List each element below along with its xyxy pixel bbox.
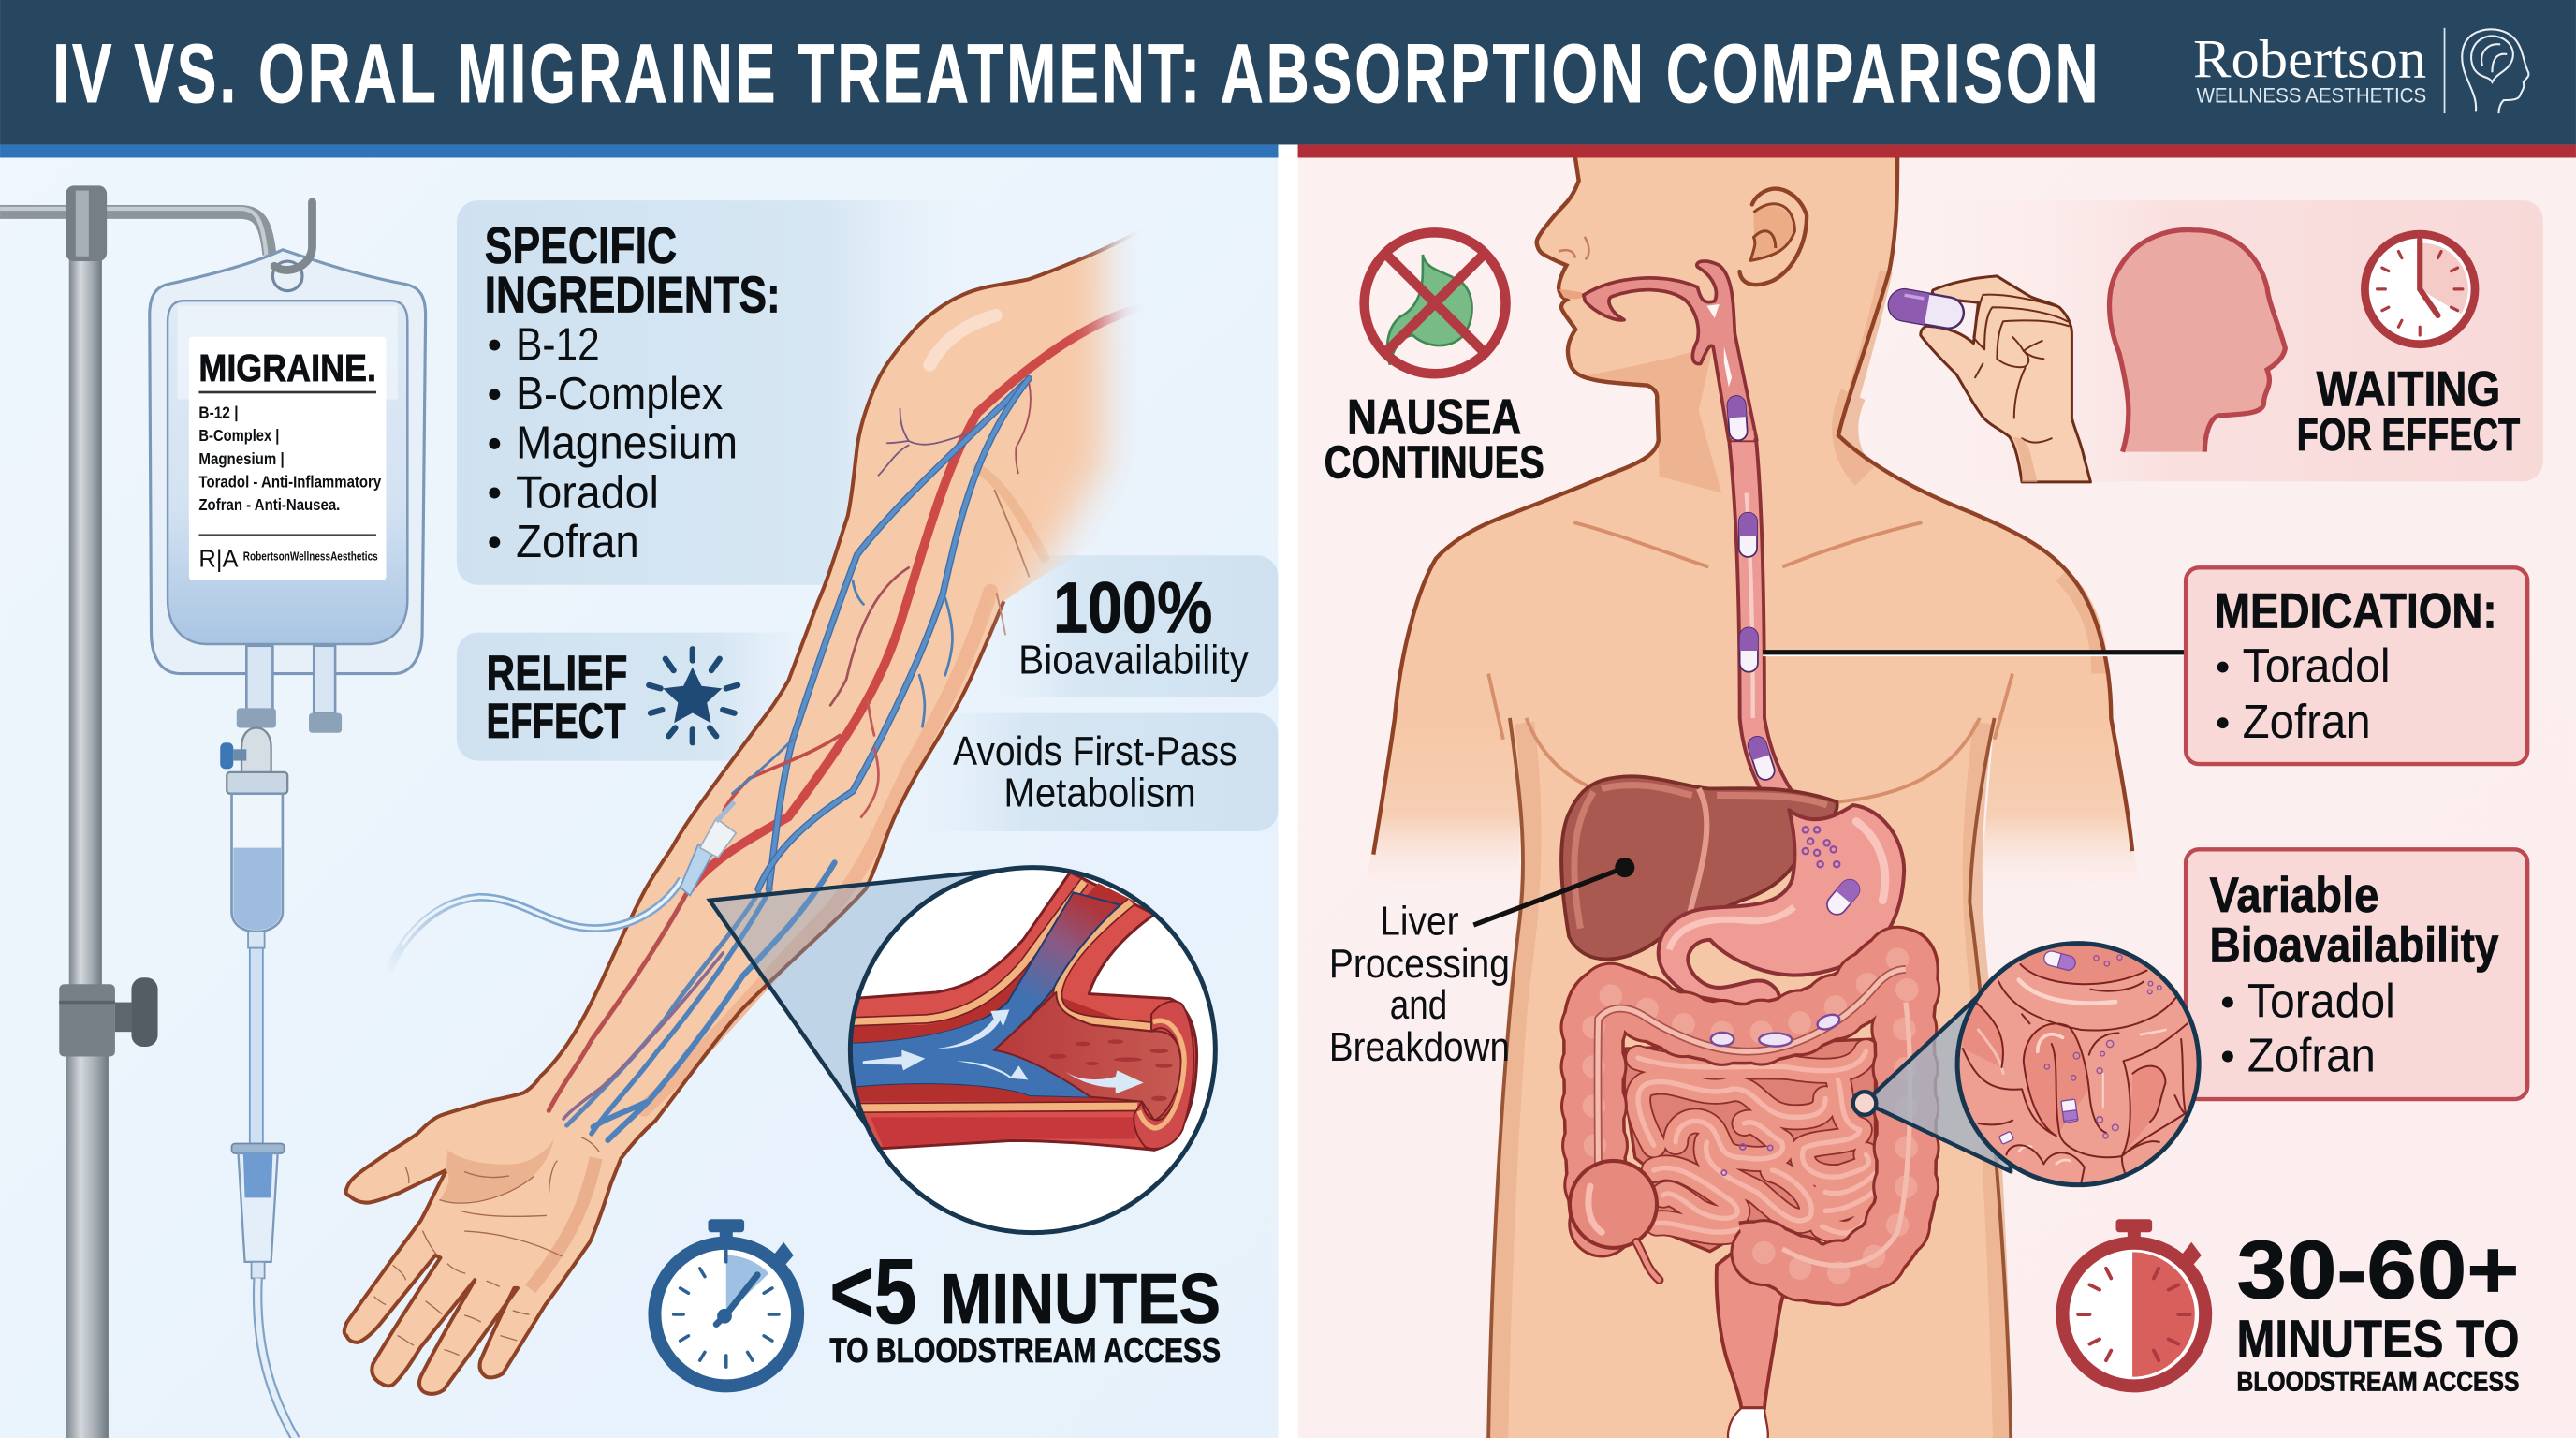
medication leader line [1763,653,2187,654]
stopwatch: 30-60+ minutes [2062,1219,2205,1386]
bag label: Magnesium | [198,449,285,468]
liver callout: Processing [1329,941,1510,987]
bag label [189,337,386,580]
info box: variable bioavailability: Variable [2210,868,2378,923]
flow arrows [863,1009,1144,1093]
info box: specific ingredients: B-Complex [516,369,724,419]
info box: variable bioavailability [2186,849,2527,1099]
label: nausea continues: CONTINUES [1325,438,1544,489]
large intestine [1570,958,1910,1438]
info box: variable bioavailability: Bioavailability [2210,918,2498,974]
appendix [1636,1242,1660,1280]
icon: hand holding capsule [1886,276,2090,482]
pole clamp [59,977,158,1056]
panel: waiting for effect [1886,200,2543,482]
magnifier cone for vein inset [710,869,1010,1149]
bag label: Toradol - Anti-Inflammatory [198,472,382,491]
panel: IV treatment [0,185,1278,1438]
cecum [1570,1161,1657,1248]
lip shade [1559,289,1587,299]
palm details [374,1137,599,1355]
logo [2193,28,2528,113]
IV bag [150,202,426,674]
neck and jaw shading [1582,345,1721,493]
IV tubing and drip chamber [220,646,342,1438]
esophagus and mouth passage [1584,261,1808,829]
colon centre band [1598,969,1906,1224]
capsules in esophagus [1727,395,1777,782]
label: waiting for effect: WAITING [2317,361,2500,417]
drip chamber [232,794,283,932]
stat: 30-60+ minutes [2237,1224,2519,1398]
info box: specific ingredients: Magnesium [516,418,738,469]
icon: head silhouette [2110,230,2285,452]
header bar [0,0,2576,144]
small intestine [1624,1039,1875,1252]
bag label: B-12 | [198,404,239,422]
stat: 30-60+ minutes: 30-60+ [2237,1224,2519,1315]
logo: Robertson [2193,28,2426,89]
info box: medication [2186,567,2527,764]
bag label: RobertsonWellnessAesthetics [243,549,378,563]
arm shading [644,315,1045,1109]
section colour strips [0,144,2576,157]
panel: oral treatment [1325,148,2543,1438]
liver callout: and [1390,982,1447,1028]
veins lower forearm [549,862,835,1140]
magnifier cone for intestine inset [1865,981,2011,1171]
info box: relief effect: RELIEF [487,646,627,701]
label: nausea continues: NAUSEA [1347,389,1521,445]
magnifier origin ring [1853,1092,1876,1115]
rectum tip [1728,1408,1768,1438]
magnifier cone edges [710,869,1010,1149]
info box: medication: Toradol [2243,638,2391,692]
info box: avoids first-pass metabolism: Metabolism [1003,770,1196,816]
info box: specific ingredients: SPECIFIC [485,217,677,274]
intestine close-up inset [1957,944,2199,1185]
stat: 30-60+ minutes: MINUTES TO [2237,1310,2519,1369]
body outline [1373,148,2132,855]
liver callout: Liver [1380,899,1459,945]
info box: specific ingredients [457,200,986,585]
coil outlines [1963,964,2188,1182]
coil highlights [1978,980,2165,1164]
info box: specific ingredients: INGREDIENTS: [485,266,781,323]
label: nausea continues [1325,389,1544,489]
icon: nausea continues [1365,232,1506,374]
liver callout [1329,858,1634,1070]
panel: IV treatment background [0,144,1278,1438]
nose detail [1559,237,1589,259]
info box: medication: MEDICATION: [2215,583,2497,638]
info box: specific ingredients: B-12 [516,319,600,370]
info box: avoids first-pass metabolism [887,713,1278,831]
panel: oral treatment background [1298,144,2576,1438]
logo: WELLNESS AESTHETICS [2197,84,2426,108]
bag label: R|A [198,544,239,572]
info box: specific ingredients: Toradol [516,467,659,518]
icon: relief star [649,649,738,742]
IV pole [0,185,270,1438]
info box: medication: Zofran [2243,695,2371,748]
info box: 100% bioavailability [970,555,1278,697]
stat: under 5 minutes: TO BLOODSTREAM ACCESS [829,1331,1221,1370]
back of neck and torso side shading [1499,271,2100,1438]
stat: under 5 minutes: <5 [829,1240,916,1343]
illustration: arm with veins [344,213,1183,1394]
info box: specific ingredients: Zofran [516,517,639,567]
IV catheter and tubing [388,801,736,973]
bag label: Zofran - Anti-Nausea. [198,495,340,514]
dissolved capsules in colon [1711,1012,1841,1047]
stat: under 5 minutes: MINUTES [940,1259,1221,1338]
info box: variable bioavailability: Zofran [2247,1028,2376,1081]
capsule fragments [1998,949,2078,1144]
stomach [1659,805,1904,1010]
blood cells [1049,1039,1173,1101]
info box: relief effect: EFFECT [487,694,626,749]
vein cross-section inset [842,868,1215,1233]
info box: variable bioavailability: Toradol [2247,974,2395,1027]
ports [246,646,272,712]
capsule [1886,287,1966,330]
open vessel end [1134,1002,1193,1149]
liver [1561,776,1837,959]
stat: under 5 minutes [829,1240,1221,1370]
arm outline [344,228,1145,1394]
bag label: MIGRAINE. [198,346,376,389]
ear [1739,189,1807,285]
peach wall stripes [842,882,1151,1108]
info box: relief effect [457,633,835,761]
icon: clock [2364,234,2475,345]
label: waiting for effect [2297,361,2520,461]
veins upper arm and forearm [690,305,1149,889]
liver callout: Breakdown [1329,1024,1510,1070]
info box: 100% bioavailability: Bioavailability [1018,638,1249,683]
valve [242,727,271,774]
red lumen [994,992,1181,1121]
info box: 100% bioavailability: 100% [1053,568,1212,649]
stat: 30-60+ minutes: BLOODSTREAM ACCESS [2237,1367,2519,1398]
blue flow channel [842,892,1120,1097]
icon: head with brain [2462,29,2528,113]
illustration: human torso [1367,148,2139,1438]
shaded coils [1963,946,2165,1156]
info box: avoids first-pass metabolism: Avoids First-Pass [953,728,1237,774]
rectum [1717,1232,1808,1408]
bag label: B-Complex | [198,426,279,445]
vessel wall [842,873,1197,1150]
hook [274,202,313,270]
stopwatch: under 5 minutes [654,1219,798,1386]
